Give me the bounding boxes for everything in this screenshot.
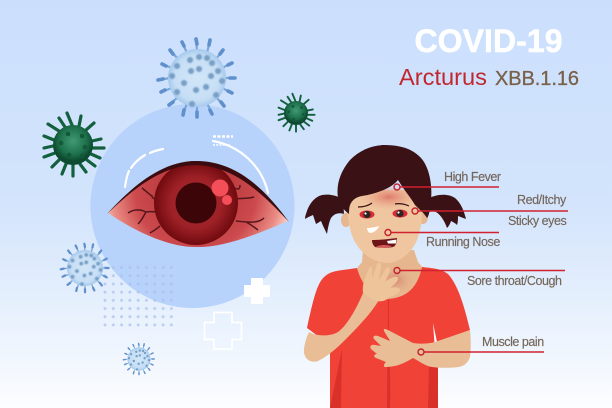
callout: red itchy sticky eyes: Sticky eyes <box>508 214 566 228</box>
callout: muscle pain <box>418 335 544 355</box>
neck <box>357 250 423 299</box>
callout: sore throat <box>394 268 565 288</box>
shirt shadows <box>330 300 438 408</box>
hair <box>338 145 431 218</box>
red spots <box>212 180 232 205</box>
face <box>347 190 422 263</box>
mouth <box>372 238 397 248</box>
shirt <box>307 267 470 408</box>
white arcs around the eye <box>125 136 268 193</box>
callout: red itchy sticky eyes: Red/Itchy <box>517 193 567 207</box>
subtitle: variant: XBB.1.16 <box>495 68 579 90</box>
icon: small green virus <box>279 94 315 132</box>
red eye illustration <box>107 161 289 247</box>
throat redness <box>375 265 415 295</box>
nasal discharge <box>367 226 379 233</box>
icon: large green virus <box>44 113 104 176</box>
callout: red itchy sticky eyes <box>412 193 568 228</box>
icon: outlined white cross <box>204 312 242 349</box>
upper eyelid <box>107 161 289 222</box>
icon: medium blue virus <box>61 244 109 292</box>
iris <box>154 161 238 245</box>
shirt slit <box>433 323 437 343</box>
girl illustration <box>304 145 471 408</box>
eyebrows <box>358 203 409 207</box>
veins <box>128 185 264 233</box>
callout: muscle pain: Muscle pain <box>482 335 544 349</box>
callout: running nose <box>385 230 500 249</box>
callout: sore throat: Sore throat/Cough <box>467 274 562 288</box>
right eye <box>392 210 408 218</box>
forehead redness <box>359 184 419 210</box>
callout: running nose: Running Nose <box>426 235 500 249</box>
left arm <box>304 293 379 362</box>
icon: small blue virus <box>123 343 154 375</box>
dot grid <box>101 264 176 328</box>
throat hand <box>363 263 400 301</box>
pupil <box>176 182 216 224</box>
ears <box>341 210 428 227</box>
title: COVID-19 <box>414 23 562 59</box>
pigtail right <box>425 195 466 228</box>
subtitle: Arcturus: Arcturus <box>399 64 487 90</box>
left eye <box>360 210 374 218</box>
icon: large blue virus <box>158 39 235 117</box>
large blue circle behind the eye <box>90 104 294 308</box>
right arm and hand <box>370 329 471 368</box>
callout: high fever <box>394 170 501 190</box>
sclera <box>108 162 288 247</box>
icon: solid white cross <box>244 278 270 304</box>
callout: high fever: High Fever <box>444 170 501 184</box>
pigtail left <box>305 195 344 234</box>
